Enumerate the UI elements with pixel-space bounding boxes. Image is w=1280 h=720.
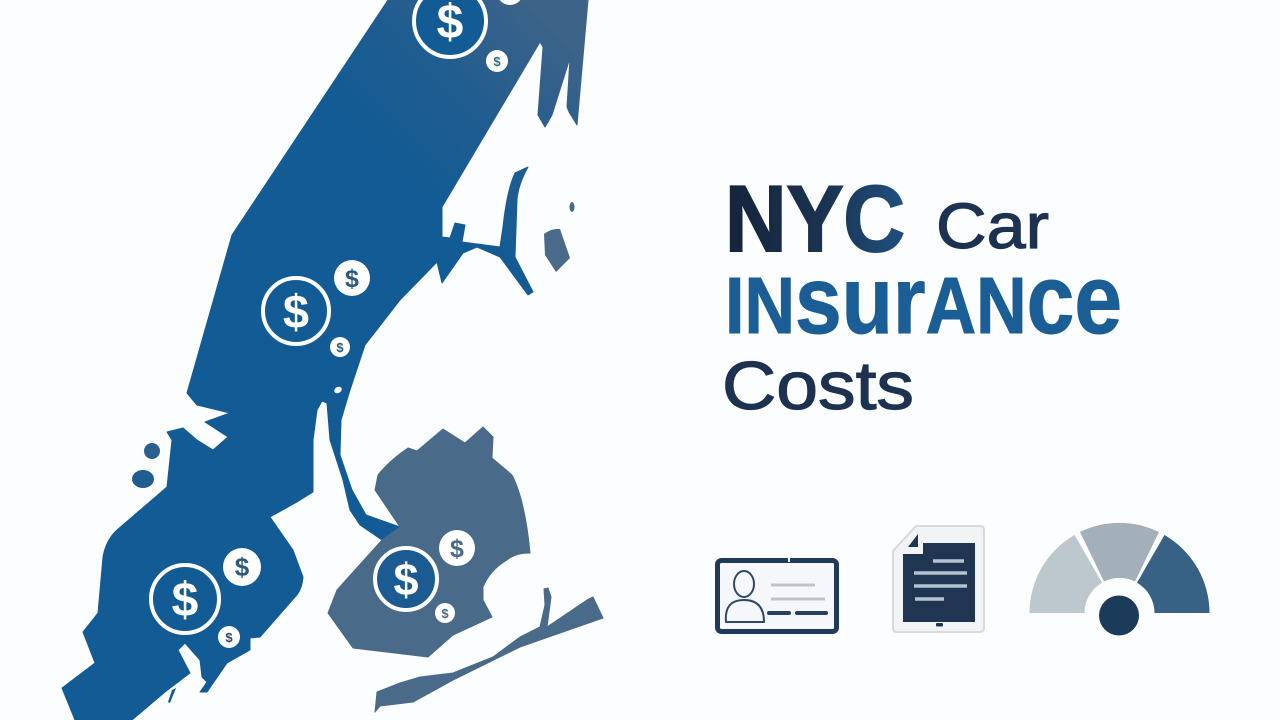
large dollar coin: $ [393,554,419,605]
title: NYC Car Insurance Costs [722,166,1122,424]
medium dollar coin: $ [345,265,359,293]
coin cluster: Brooklyn [151,548,261,648]
small dollar coin: $ [493,54,501,69]
map region: Roosevelt shard [544,229,570,272]
coin cluster: top [414,0,523,72]
coin cluster: Queens [375,530,475,623]
title line: NYC: NYC [725,166,905,271]
gauge segment: high [1137,535,1210,613]
map detail: small white island [333,385,343,395]
icon: cost gauge [1030,523,1210,636]
map region: Bronx, Manhattan and Brooklyn landmass [62,0,588,720]
icon: policy document [893,526,984,632]
medium dollar coin: $ [235,552,250,582]
map: New York City boroughs [62,0,603,720]
large dollar coin: $ [172,574,199,627]
medium dollar coin: $ [450,535,464,563]
small dollar coin: $ [441,606,449,621]
map region: western islet upper [144,443,160,459]
gauge hub [1099,596,1139,636]
icon: driver licence card [718,556,836,632]
map region: western islet lower [132,470,154,488]
small dollar coin: $ [336,340,344,355]
map region: tiny islet [570,202,574,212]
partial dollar coin [497,0,523,5]
map region: Rockaway peninsula [375,588,603,712]
map detail: small inlet sliver [168,688,176,703]
map region: Queens [328,427,530,657]
title line: Insurance: INsurANce [725,244,1122,354]
large dollar coin: $ [283,285,309,338]
gauge segment: medium [1080,523,1159,582]
title line: Car: Car [936,190,1049,262]
gauge segment: low [1030,535,1102,613]
small dollar coin: $ [225,630,233,645]
title line: Costs: Costs [722,348,914,424]
coin cluster: Manhattan [263,260,370,357]
